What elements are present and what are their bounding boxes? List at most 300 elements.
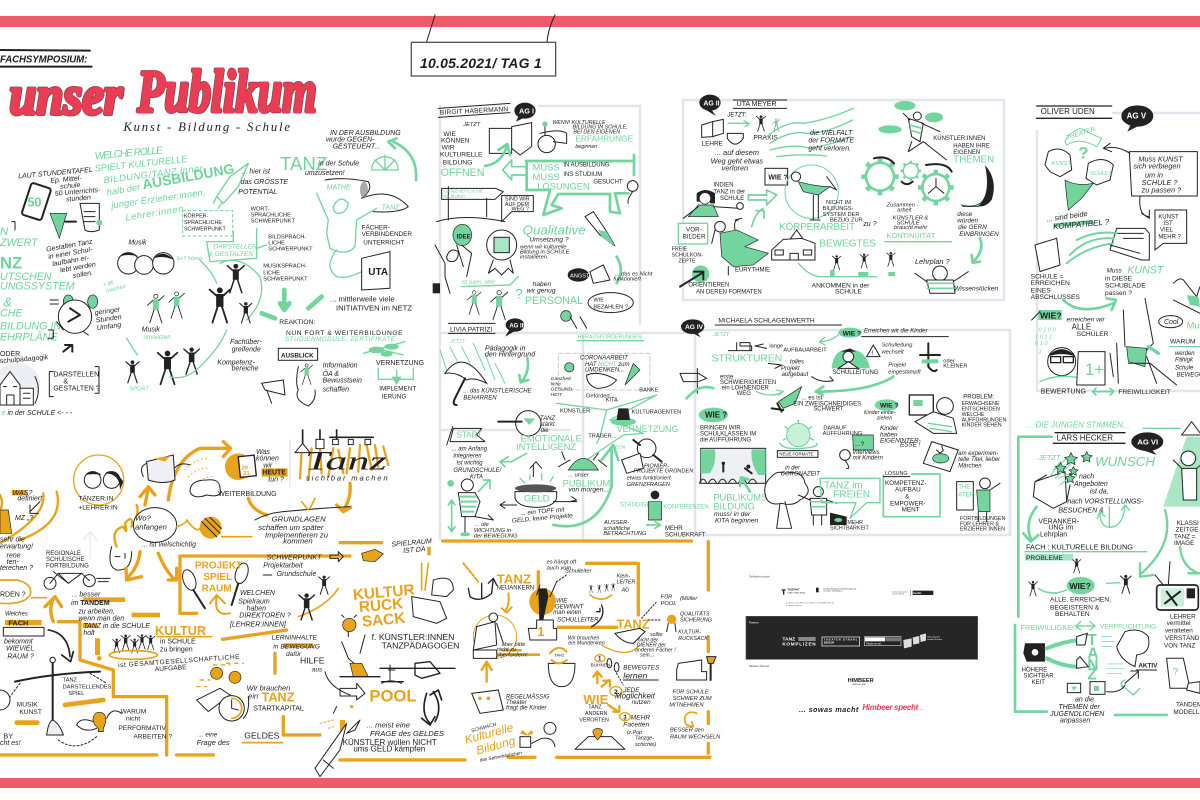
text: zweischneidiges Schwert: ... es ist — [802, 395, 823, 401]
badge: Angst — [568, 257, 621, 283]
text: left bottom: BY — [3, 731, 13, 740]
text: Verankerung: VERANKER- — [1038, 518, 1080, 525]
label: aktiv: AKTIV — [1138, 662, 1158, 669]
text: Frage des Geldes: Frage des — [197, 738, 230, 747]
text: Problem: KINDER SEHEN — [962, 423, 1002, 429]
dashed box: körpersprachlicher Schwerpunkt: SCHWERPUNKT — [184, 227, 226, 233]
text: Schule = Abschluss: ERREICHEN — [1031, 280, 1070, 287]
list: for pool: SICHERUNG — [680, 618, 712, 624]
digits: 1 0 1 1 — [1035, 334, 1052, 340]
portrait: Tänzer:in und Lehrer:in: +LEHRER:IN — [78, 504, 118, 511]
text: Erwartungen: rene — [7, 552, 21, 559]
list: for pool: (Müller — [680, 596, 698, 602]
step 2: Möglichkeit — [615, 691, 656, 700]
text: Fortbildung: FÜR LEHRER & — [960, 521, 999, 528]
figure: dancer with speech bubbles — [878, 101, 947, 160]
text: Kinder haben: EIGENINTER- — [880, 438, 921, 445]
figure: podium — [528, 582, 557, 640]
text: Gestalten Tanz: Gestalten Tanz — [46, 239, 94, 254]
green arrows — [262, 290, 322, 318]
text: Vielfalt: der FORMATE — [808, 138, 854, 145]
text: hängt ab: auch vom — [547, 565, 571, 571]
text: Diener: anderen Fächer ! — [635, 648, 676, 654]
green note: machen — [106, 284, 127, 295]
label: Probleme — [1025, 554, 1073, 562]
text: besser im Tandem: TANZ in die SCHULE — [83, 623, 150, 630]
text: alle erreichen: ALLE, ERREICHEN, — [1050, 597, 1111, 604]
text: welches Fach — [3, 612, 44, 660]
text: eigene Erfahrungen: ERFAHRUNGE — [575, 133, 634, 143]
icon: magnifier — [622, 439, 662, 473]
text: Problem: AUFFÜHRUNGEN — [962, 416, 1006, 423]
text: Muss in Ausbildung: LÖSUNGEN — [537, 181, 590, 191]
flag: Start: START — [457, 430, 482, 439]
heading: MICHAELA SCHLAGENWERTH — [718, 318, 815, 325]
panel: AG III Livia Patrizi: IDEEN — [610, 444, 626, 450]
step 3: 3 — [623, 715, 627, 721]
text: Stundentafel: stunden — [66, 194, 91, 204]
text: Diener: sollte — [650, 632, 662, 638]
logos: funders — [782, 587, 933, 607]
icon: grade paper: 1+ — [1085, 360, 1104, 379]
text: Ausbildung gegengesteuert: GESTEUERT... — [333, 143, 380, 150]
text: Stundentafel: schule — [60, 182, 81, 191]
text: Bewertung Freiwilligkeit — [1041, 388, 1171, 396]
logo: Tanz Komplizen: TANZ — [782, 637, 795, 643]
Vernetzung network: KITA — [606, 398, 618, 404]
text: Publikum von morgen: von morgen... — [568, 487, 609, 494]
icon: rackets — [180, 561, 251, 608]
text: eigene Erfahrungen: beginnen — [575, 144, 597, 150]
text: Frage des Geldes: FRAGE des GELDES — [370, 729, 445, 738]
text: wissenschaftliche Betrachtung: SCHUBKRAFT — [665, 533, 706, 539]
text: Körperarbeit: KÖRPERARBEIT — [779, 222, 855, 233]
text: in der Coronazeit: in der — [785, 465, 801, 471]
text: Erwartungen: terechen ? — [0, 565, 33, 572]
text: Jetzt: JETZT — [1037, 453, 1061, 462]
text: tolles Projekt: Projekt — [781, 366, 800, 372]
text: emotionale Intelligenz: EMOTIONALE — [521, 434, 582, 444]
text: Publikumsbildung — [713, 493, 767, 525]
text: Schulklassen: SCHULKLASSEN IM — [700, 432, 756, 438]
text: Tanz stärkt: die — [541, 428, 549, 434]
text: wissenschaftliche Betrachtung: MEHR — [665, 526, 683, 532]
text: funktioniert nicht: funktioniert — [613, 277, 641, 283]
figure: boy with glasses — [1040, 348, 1087, 382]
step 1: 1 — [598, 657, 602, 663]
text: Wir brauchen Startkapital: Wir brauchen — [247, 684, 290, 693]
text: regelmäßig Theater: Theater — [506, 700, 528, 706]
panel: AG IV Michaela Schlagenwerth: KLEINER — [943, 364, 968, 370]
logo: Theater Strahl: THEATER STRAHL — [824, 637, 858, 641]
panel: AG VI Lars Hecker — [1015, 420, 1200, 725]
heading: Tanz: TANZ — [617, 617, 650, 631]
text: Schwerpunkt Projektarbeit: Grundschule — [277, 571, 316, 578]
figure: podium: 1 — [537, 625, 544, 639]
bubble: cool: Cool — [1164, 319, 1179, 326]
green outlined frame — [503, 155, 634, 215]
step 3: MEHR — [631, 714, 650, 721]
text: klassisch zeitgenössisch: ZEITGE — [1176, 527, 1199, 534]
box: Lösung — [883, 470, 940, 517]
list: for pool: FÜR — [661, 593, 672, 600]
text: Wie können wir öffnen: KULTURELLE — [440, 152, 483, 159]
text: Muss Kunst Schublade: in DIESE — [1105, 276, 1133, 283]
text: bewegtes Lernen: lernen — [623, 670, 648, 680]
text: eigene Erfahrungen: WENN! KULTURELLE — [552, 120, 606, 126]
heading: Tanz sichtbar machen: Tanz — [305, 446, 387, 475]
label: Medien Partner: Medien Partner — [749, 664, 769, 668]
text: Information: Information — [323, 363, 358, 370]
text: Lerninhalte in Bewegung: in BEWEGUNG — [273, 643, 320, 650]
group of people — [109, 634, 157, 659]
text: Pool: POOL — [369, 687, 417, 706]
heading: Tanz in der Schule: in der Schule — [318, 161, 359, 168]
box: Lösung: LÖSUNG — [885, 470, 907, 477]
text: erreichen wir die Kinder: Erreichen wir die Kinder — [864, 329, 929, 335]
text: regionale Fortbildung — [46, 532, 97, 569]
text: Zusammenarbeit — [885, 203, 952, 242]
bubble: Wie 1 — [819, 328, 862, 345]
text: Personal: wir genug — [527, 288, 556, 295]
step 1: BÜHNEN — [591, 662, 610, 668]
green question text: SPIELT KULTURELLE — [94, 154, 189, 174]
text: Muss Kunst Schublade: KUNST — [1127, 264, 1165, 276]
bracket: Darstellen & Gestalten: GESTALTEN ? — [53, 386, 100, 393]
text: Information: schaffen — [323, 387, 349, 394]
text: Wir brauchen Startkapital: ein — [248, 691, 258, 700]
Vernetzung flow: IERUNG — [382, 393, 406, 400]
figure with idea balloon: IDEE — [457, 234, 471, 240]
panel: AG IV Michaela Schlagenwerth — [680, 318, 1006, 533]
icon: audience publikum — [558, 452, 607, 470]
icon: singing faces: Musik — [128, 239, 147, 246]
text: Für Schule: SCHWER ZUM — [673, 696, 712, 702]
text: in der Coronazeit: CORONAZEIT — [781, 471, 821, 477]
text: Kinder haben: Kinder — [880, 425, 899, 432]
text: Initiativen im Netz: INITIATIVEN im NETZ — [336, 304, 412, 313]
black dancers: sport — [126, 347, 199, 393]
green note: + 86 — [102, 280, 115, 289]
bubble: wo anfangen — [133, 508, 196, 549]
text: Kinder haben: ESSE ! — [900, 442, 921, 449]
text: Reaktion: REAKTION: — [279, 319, 315, 326]
title: unser Publikum: unser — [9, 65, 123, 126]
heading: Kultur: KULTUR — [155, 624, 206, 638]
icon: head thinking — [548, 648, 575, 687]
text: hängt ab: Schulleiter — [565, 569, 593, 575]
green text: Stellenwert Tanz: ZWERT — [0, 237, 39, 249]
icon: stage lamps with light rays — [295, 430, 388, 480]
orange frame lines — [340, 541, 710, 760]
text: Spielraum ist da: IST DA — [403, 546, 426, 555]
green text: Stellenwert Tanz: EHRPLÄNE — [0, 332, 58, 344]
text: Musik umsetzen: umsetzen — [143, 334, 171, 341]
pale panel frames — [440, 100, 1200, 540]
icon: bricks — [728, 343, 767, 351]
icon: monitor UTA: UTA — [368, 267, 388, 278]
icon: head with headset — [498, 411, 541, 436]
text: Ankommen: ANKOMMEN in der — [812, 282, 870, 289]
text: freie Schulkonzepte: FREIE — [672, 247, 688, 253]
text: was können wir heute tun: können — [256, 456, 279, 463]
heading: die jungen Stimmen: ... DIE JUNGEN STIMMEN... — [1027, 420, 1130, 429]
text: Information: Bewusstsein — [323, 378, 362, 385]
icon: TV — [1155, 562, 1198, 610]
green label: Herausforderungen: HERAUSFORDERUNGEN — [578, 334, 642, 340]
text: nicht im Bildungssystem: BILDUNGS- — [823, 206, 854, 212]
green frame — [1015, 437, 1167, 715]
icon: shuttlecock — [362, 549, 383, 562]
text: Pädagogik im Hintergrund: Pädagogik in — [485, 346, 525, 353]
icon: coins and pencil — [340, 705, 360, 733]
icon: green coin hand — [561, 311, 587, 328]
text: nicht im Bildungssystem: BEZUG ZUR — [830, 218, 863, 224]
icon: book green: ? — [1173, 667, 1179, 678]
label: Probleme: PROBLEME — [1026, 555, 1064, 562]
text: Fach kulturelle Bildung: FACH : KULTURELLE BILDUNG — [1026, 542, 1133, 551]
green text: Zertifikate: STUDIENMODULE, ZERTIFIKATE... — [285, 336, 402, 343]
black dancers: sport: SPORT — [129, 387, 149, 393]
text: regelmäßig Theater: REGELMÄSSIG — [506, 693, 550, 700]
text: Lehrer vermittelt: VERSTÄND — [1165, 634, 1200, 642]
text: Körperarbeit: zu ? — [862, 221, 877, 228]
text: Problem: ERWACHSENE — [962, 401, 1000, 407]
text: höhere Sichtbarkeit: HÖHERE — [1022, 667, 1047, 674]
arrow: from Tanz to Grundlagen — [337, 483, 351, 512]
text: nach Angeboten: ist da, — [1090, 488, 1109, 495]
icon: backpack — [412, 578, 453, 623]
text: Freiwilligkeit Verpflichtung — [1021, 622, 1156, 632]
panel: AG IV Michaela Schlagenwerth: JETZT — [712, 332, 730, 338]
text: wissenschaftliche Betrachtung: schaftliche — [603, 526, 630, 532]
box: Lösung: EMPOWER- — [890, 501, 925, 508]
text: am Anfang integrieren: KITA — [470, 475, 483, 481]
text: Personal — [462, 277, 583, 320]
bracket: Darstellen & Gestalten: DARSTELLEN — [53, 372, 99, 379]
icon: calendar with sun: 21 — [243, 471, 250, 477]
bubble: muss Kunst verbiegen: sich verbiegen — [1133, 162, 1181, 171]
text: Schwerpunkte: MUSIKSPRACH- — [263, 264, 307, 270]
icon: black camera hands — [1023, 633, 1088, 668]
puzzle: Kunst — [1045, 149, 1072, 177]
icon: book and Lehre: JETZT: — [726, 113, 747, 119]
figure: teacher with theater board: ATER — [958, 493, 974, 499]
logo: Tanz Komplizen — [782, 637, 816, 646]
icon: people row — [589, 583, 616, 599]
badge: AG I — [514, 103, 536, 122]
heading: BIRGIT HABERMANN — [440, 106, 509, 117]
text: Schulleitung wechselt: Projekt — [888, 363, 906, 369]
text: Publikum von morgen: PUBLIKUM — [563, 479, 610, 489]
text: Für Schule: MITNEHMEN — [669, 703, 704, 709]
text: Lehrer überfordern: aber bitte — [502, 642, 525, 648]
sign: ganzheitliche Bildung: GANZHEITLICHE — [443, 189, 484, 195]
list: for pool: RUCKSACK — [678, 636, 708, 642]
Vernetzung network: Gefördert... — [586, 393, 615, 399]
icon: microphone: ...? — [855, 441, 865, 448]
scribble — [114, 505, 138, 547]
text: alle Schüler: ALLE — [1072, 322, 1091, 331]
text: Wir brauchen Startkapital — [247, 684, 304, 713]
green waves — [767, 108, 853, 157]
figure: person in pool — [340, 635, 455, 682]
text: Diener: sein... — [640, 653, 654, 659]
text: was können wir heute tun: HEUTE — [262, 470, 286, 477]
text: höhere Sichtbarkeit: SICHTBAR — [1023, 674, 1054, 680]
heading: AG III — [509, 324, 525, 330]
text: freie Schulkonzepte: SCHULKON- — [672, 253, 703, 259]
list: for pool: POOL — [661, 601, 676, 607]
logo: Himbeer: BERLIN MIT KIND — [852, 684, 867, 686]
text: Qualitative Umsetzung: wenn wir kulturelle — [520, 244, 567, 250]
flag: Start — [447, 427, 485, 445]
text: besser im Tandem: im TANDEM — [71, 600, 110, 607]
text: nach Angeboten: BESUCHEN & — [1058, 508, 1104, 515]
icon: crossed figure — [1173, 279, 1200, 313]
badge: Wie 3 — [699, 408, 728, 422]
text: Freiwilligkeit Verpflichtung: VERPFLICHTUNG — [1100, 623, 1156, 630]
text: Publikum von morgen: ... unser — [568, 473, 590, 479]
text: Stundentafel: LAUT STUNDENTAFEL — [18, 167, 93, 180]
icon: calendar with sun — [225, 453, 256, 480]
text: Tanz darstellendes Spiel — [63, 678, 112, 705]
icon: stage — [699, 448, 766, 483]
figure: Eurythmie — [712, 218, 768, 275]
text: Schwerpunkte: SCHWERPUNKT — [251, 219, 295, 225]
bubble: muss Kunst verbiegen: Muss KUNST — [1138, 155, 1183, 164]
text: gesamtgesellschaftlich: AUFGABE — [155, 664, 187, 673]
text: kompatibel: KOMPATIBEL ? — [1053, 217, 1110, 231]
step 3: (z.Pop — [627, 730, 642, 736]
panel: AG III Livia Patrizi — [440, 318, 709, 539]
text: besser im Tandem — [71, 592, 160, 637]
swords and head in lower middle area — [315, 672, 350, 777]
text: Zusammenarbeit: braucht mehr — [894, 225, 928, 231]
text: Schwerpunkte: SPRACHLICHE — [251, 213, 291, 219]
text: zweischneidiges Schwert: SCHWERT — [813, 407, 844, 413]
text: welches Fach: bekommt — [4, 638, 34, 645]
icon: warning triangle: ! — [872, 350, 874, 357]
text: Grundlagen schaffen — [255, 498, 350, 545]
text: Verankerung: UNG im — [1048, 524, 1073, 531]
figure: teacher with theater board: THE — [958, 484, 970, 490]
arrows and head — [1102, 630, 1149, 673]
text: Künstler:innen Themen: KÜNSTLER:INNEN — [933, 135, 986, 142]
text: Strukturen: STRUKTUREN — [712, 354, 782, 365]
box: Vorbilder: VOR- — [686, 227, 702, 234]
icon: warning triangle — [867, 345, 880, 357]
text: Publikumsbildung: BILDUNG — [713, 501, 755, 511]
word: Tanz vertical: N — [1087, 657, 1098, 674]
text: performativ: ARBEITEN ? — [133, 733, 172, 740]
text: Lehrer überfordern: nicht zu — [497, 647, 517, 653]
stars in box — [1033, 452, 1092, 508]
green text: Stellenwert Tanz: N — [0, 226, 9, 238]
icon: megaphone hand — [262, 367, 315, 406]
icon: gears — [861, 157, 954, 205]
text: Reaktion: NUN FORT & WEITERBILDUNGE — [286, 330, 403, 337]
digits: 1 — [1038, 349, 1041, 355]
icon: Schulleitung: SCHULLEITUNG — [832, 370, 879, 376]
icon: ship wheel with arrow — [372, 138, 416, 180]
portrait: Tänzer:in und Lehrer:in: TÄNZER:IN — [78, 495, 114, 503]
logos: funders: der Bundesregierung — [786, 605, 802, 607]
text: Ankommen: SCHULE — [835, 288, 863, 295]
Vernetzung network: BANKE — [639, 388, 659, 394]
bubble: auf dem Weg: AUF DEM — [505, 202, 529, 208]
step 3: Facetten — [623, 722, 650, 729]
text: Schwierigkeiten: SCHWIERIGKEITEN — [720, 380, 776, 386]
icon: periscope — [382, 665, 402, 683]
step 3: schichte) — [635, 742, 657, 748]
text: Tanz darstellendes Spiel: SPIEL — [68, 691, 84, 697]
text: Kulturelle Bildung: das Sahnehäubchen — [479, 750, 523, 763]
green box: Darstellen & Gestalten: DARSTELLEN — [213, 243, 257, 250]
dashed box: Corona: CORONAARBEIT — [580, 355, 629, 361]
Vernetzung flow — [376, 360, 424, 400]
text: Wichtung in Bewegung: ... die — [475, 522, 489, 528]
list: for pool: KULTUR- — [678, 629, 701, 635]
icon: signpost — [680, 368, 713, 398]
panel: sponsors — [746, 574, 978, 714]
text: was können wir heute tun: tun ? — [268, 477, 284, 484]
text: Lehrer vermittelt: veralteten — [1165, 627, 1193, 634]
footsteps — [607, 659, 623, 685]
text: Lehrer vermittelt: VON TANZ — [1164, 642, 1196, 649]
green person — [317, 193, 377, 277]
heading — [1037, 106, 1112, 118]
text: geringer Stundenumfang: Umfang — [96, 322, 122, 332]
sign: ganzheitliche Bildung: BILDUNG — [443, 194, 466, 200]
dashed box: Corona: GESUND- — [551, 387, 574, 393]
icon: tree — [765, 472, 808, 528]
logo: film strip: kreative Schulen — [927, 638, 942, 641]
text: gesamtgesellschaftlich — [118, 638, 240, 673]
text: wissenschaftliche Betrachtung: BETRACHTUNG — [603, 531, 647, 537]
bubble: wie bezahlen: BEZAHLEN ? — [593, 304, 628, 310]
text: besser im Tandem: wenn man den — [78, 616, 124, 623]
text: Schulleitung wechselt: wechselt — [882, 349, 904, 355]
box: Lösung: AUFBAU — [895, 487, 921, 494]
text: experimentelle Titel: telle Titel, lieber — [958, 457, 1001, 463]
text: alle Schüler: SCHÜLER — [1077, 330, 1109, 338]
figure: green dancer backbend — [1110, 298, 1177, 385]
figure: kid at screen — [909, 395, 957, 433]
text: Künstler wollen nicht: ums GELD kämpfen — [353, 745, 425, 754]
icon: umbrella with rain — [440, 343, 505, 405]
badge: AG VI — [1131, 432, 1163, 455]
text: regionale Fortbildung: SCHULISCHE — [46, 557, 85, 563]
icon: couch with lamp — [677, 657, 716, 680]
badge: Wie — [1032, 310, 1062, 320]
text: Wir brauchen Startkapital: TANZ — [262, 691, 295, 705]
text: diese würden: die GERN — [958, 224, 987, 231]
logos: funders: Landes Berlin — [892, 593, 904, 596]
text: Schwerpunkte: SCHWERPUNKT — [263, 276, 308, 282]
icon: network — [363, 342, 405, 357]
text: funktioniert nicht: ... das es Nicht — [615, 271, 653, 277]
text: experimentelle Titel: am experimen- — [958, 451, 998, 457]
text: Publikumsbildung: KITA beginnen — [715, 518, 759, 525]
text: Frage des Geldes: ... meist eine — [367, 720, 410, 729]
text: klassisch zeitgenössisch: TANZ = — [1174, 533, 1196, 540]
step 3 — [620, 713, 657, 748]
bubble: Kunst ist viel mehr: IST — [1163, 221, 1173, 227]
badge: AG VI: AG VI — [1137, 437, 1158, 446]
icon: cloud — [190, 480, 221, 497]
text: Muss in Ausbildung: MUSS — [533, 172, 560, 182]
